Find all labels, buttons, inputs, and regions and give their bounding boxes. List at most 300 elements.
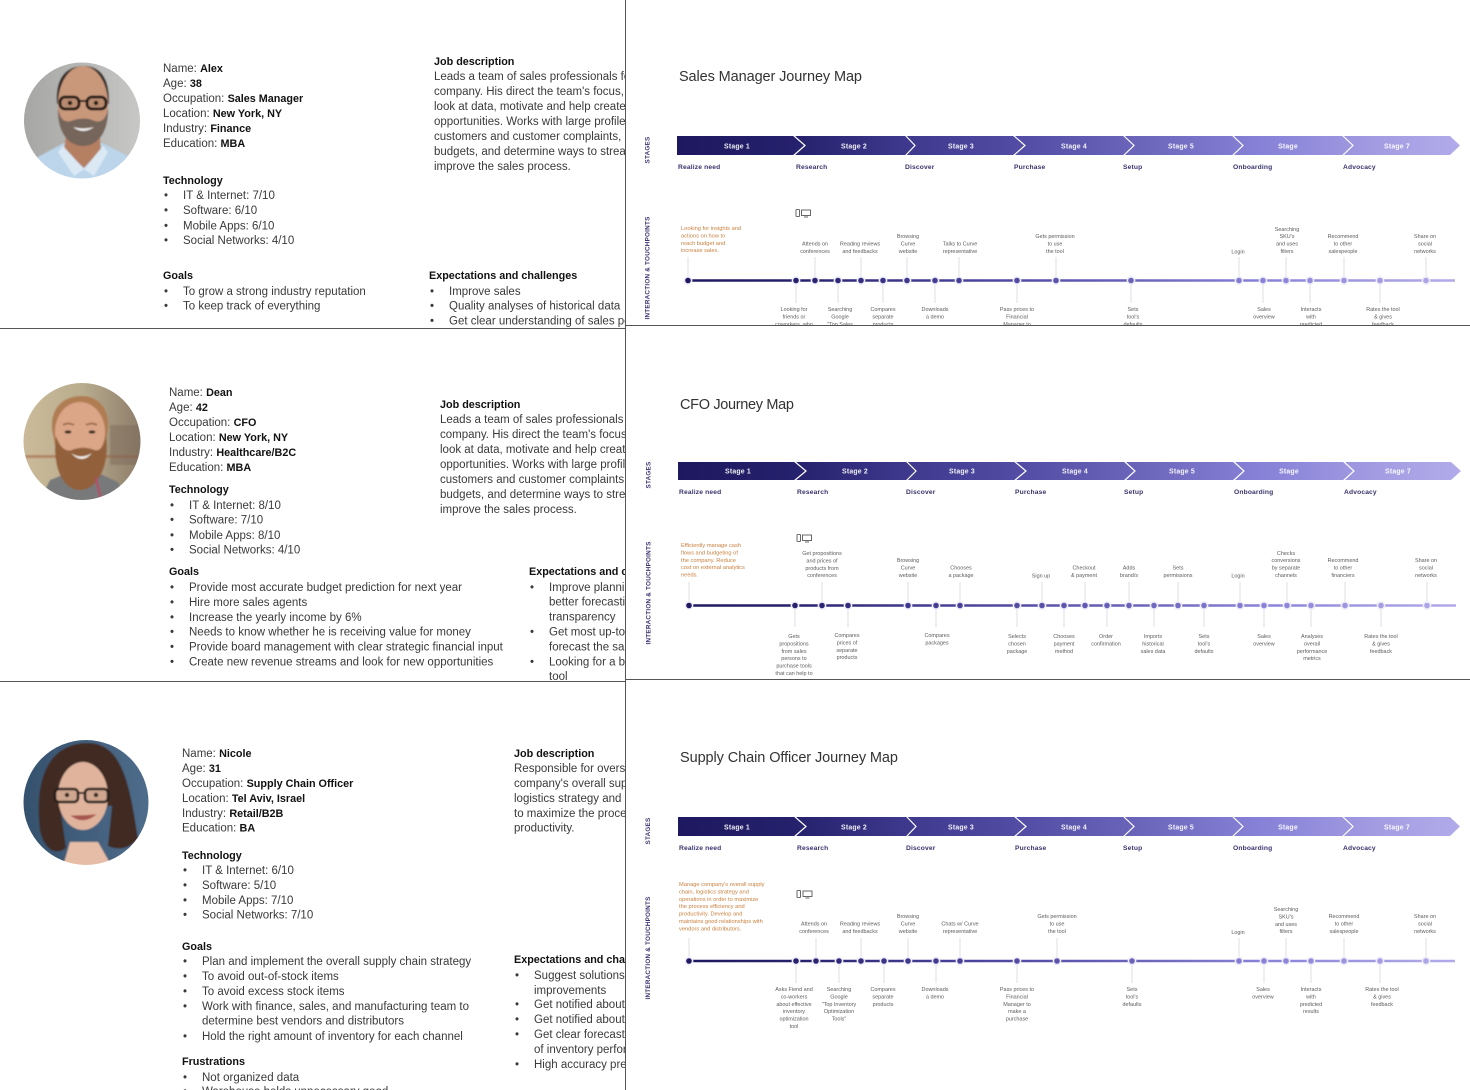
technology list: Software: 5/10	[202, 880, 276, 892]
touchpoints above line: Recommend	[1329, 914, 1359, 920]
technology list: •	[183, 895, 187, 907]
touchpoints above line: and uses	[1275, 922, 1297, 928]
touchpoints below line: Interacts	[1301, 307, 1322, 313]
job description: Job description	[440, 399, 520, 411]
touchpoints below line: "Top Sales	[827, 322, 853, 328]
customer need note: needs.	[681, 573, 698, 579]
axis label: stages: STAGES	[646, 462, 652, 488]
technology list: Social Networks: 7/10	[202, 910, 313, 922]
expectations and challenges: •	[430, 316, 434, 328]
touchpoints below line: feedback	[1370, 649, 1392, 655]
axis label: stages: STAGES	[645, 818, 652, 844]
persona details: Education: MBA	[163, 138, 245, 150]
touchpoints above line: website	[898, 929, 917, 935]
touchpoints above line: representative	[943, 249, 977, 255]
stage chevron arrow	[677, 135, 1460, 156]
touchpoints below line: Rates the tool	[1364, 634, 1398, 640]
stage chevron arrow: Stage 7	[1384, 824, 1410, 832]
customer need note: the process efficiency and	[679, 904, 745, 910]
touchpoints below line: performance	[1297, 649, 1327, 655]
goals list: •	[164, 300, 168, 312]
expectations and challenges: Get notified about	[534, 1014, 626, 1026]
touchpoints above line: by separate	[1272, 566, 1300, 572]
job description: company. His direct the team's focus,	[434, 86, 624, 98]
stage chevron arrow: Stage 3	[948, 824, 974, 832]
technology list: IT & Internet: 6/10	[202, 865, 294, 877]
photo: Alex	[24, 62, 140, 178]
touchpoints above line: Gets permission	[1037, 914, 1077, 920]
customer need note: Manage company's overall supply	[679, 882, 765, 888]
goals list: •	[170, 626, 174, 638]
persona details: Occupation: CFO	[169, 417, 256, 429]
job description	[434, 57, 625, 172]
customer need note: flows and budgeting of	[681, 550, 738, 556]
touchpoints below line: persons to	[781, 656, 807, 662]
touchpoints above line: to use	[1050, 922, 1064, 928]
expectations and challenges: forecast the sales	[549, 642, 639, 654]
stage names: Discover	[906, 489, 936, 496]
touchpoints above line: & payment	[1071, 573, 1097, 579]
connectors	[688, 257, 1426, 303]
touchpoints above line: to other	[1334, 242, 1352, 248]
goals list: Provide board management with clear strategic financial input	[189, 642, 504, 654]
touchpoints below line: co-workers	[781, 994, 808, 1000]
panel: Nicole persona	[20, 736, 679, 1090]
stage names	[678, 164, 1376, 170]
touchpoints below line: Pass prices to	[1000, 987, 1034, 993]
touchpoints below line: feedback	[1371, 1002, 1393, 1008]
persona details: Age: 31	[182, 763, 221, 775]
expectations and challenges: better forecasting	[549, 596, 638, 608]
expectations and challenges: •	[430, 300, 434, 312]
expectations and challenges: •	[515, 1059, 519, 1071]
touchpoints below line: tool's	[1126, 994, 1139, 1000]
touchpoints above line: the tool	[1046, 249, 1064, 255]
touchpoints above line: conferences	[807, 573, 837, 579]
persona details: Industry: Retail/B2B	[182, 808, 283, 820]
touchpoints below line: confirmation	[1091, 641, 1121, 647]
persona details: Location: Tel Aviv, Israel	[182, 793, 305, 805]
stage chevron arrow: Stage	[1278, 824, 1298, 832]
touchpoints below line: a demo	[926, 314, 944, 320]
stage names: Setup	[1123, 845, 1142, 852]
goals list: •	[170, 612, 174, 624]
panel: Dean persona	[24, 383, 625, 680]
touchpoints below line: Asks Fiend and	[775, 987, 813, 993]
job description: logistics strategy and operations	[514, 793, 679, 805]
expectations and challenges: Get clear forecast	[534, 1029, 626, 1041]
touchpoints above line: SKU's	[1279, 914, 1294, 920]
touchpoints below line: separate	[872, 994, 894, 1000]
timeline	[689, 960, 1455, 962]
touchpoints below line: defaults	[1122, 1002, 1142, 1008]
touchpoints above line: Share on	[1414, 914, 1436, 920]
touchpoints above line: salespeople	[1328, 249, 1358, 255]
touchpoints below line: method	[1055, 649, 1073, 655]
touchpoints above line: Login	[1231, 574, 1245, 580]
touchpoints below line: from sales	[781, 649, 807, 655]
touchpoints below line: Rates the tool	[1366, 307, 1400, 313]
touchpoints below line: & gives	[1372, 641, 1390, 647]
touchpoints below line: Compares	[870, 307, 896, 313]
touchpoints below line: with	[1305, 314, 1316, 320]
touchpoints above line: conferences	[800, 249, 830, 255]
touchpoints below line: Compares	[924, 633, 950, 639]
touchpoints below line: Selects	[1008, 634, 1026, 640]
goals list: To keep track of everything	[183, 300, 320, 312]
persona details: Location: New York, NY	[163, 108, 282, 120]
job description: opportunities. Works with large profile	[434, 116, 626, 128]
job description: Job description	[434, 56, 514, 68]
stage names: Advocacy	[1344, 489, 1377, 496]
touchpoints above line: Browsing	[897, 914, 919, 920]
stage names: Purchase	[1014, 164, 1045, 171]
touchpoints above line	[802, 551, 1437, 580]
touchpoints above line: to use	[1048, 242, 1062, 248]
expectations and challenges: High accuracy predictions	[534, 1059, 666, 1071]
touchpoints below line: with	[1305, 994, 1316, 1000]
touchpoints above line: channels	[1275, 573, 1297, 579]
stage names: Onboarding	[1233, 845, 1272, 852]
touchpoints below line: package	[1007, 649, 1027, 655]
touchpoints above line: representative	[943, 929, 977, 935]
touchpoints above line: and prices of	[806, 558, 838, 564]
goals list: Hold the right amount of inventory for each channel	[202, 1031, 463, 1043]
photo: Dean	[24, 383, 140, 500]
technology list: Mobile Apps: 7/10	[202, 895, 293, 907]
touchpoints below line: purchase	[1006, 1017, 1028, 1023]
goals list: Provide most accurate budget prediction for next year	[189, 582, 462, 594]
touchpoints above line: social	[1419, 566, 1433, 572]
timeline nodes	[685, 957, 1430, 965]
goals list: To avoid out-of-stock items	[202, 971, 339, 983]
expectations and challenges: Get most up-to-date	[549, 626, 651, 638]
touchpoints below line: Sales	[1257, 307, 1271, 313]
panel: Sales Manager journey map	[644, 69, 1460, 328]
goals list: •	[183, 1031, 187, 1043]
expectations and challenges: Get notified about	[534, 999, 626, 1011]
goals list: •	[183, 1001, 187, 1013]
touchpoints above line: conversions	[1271, 558, 1301, 564]
stage chevron arrow: Stage 4	[1061, 144, 1087, 150]
stage chevron arrow	[678, 816, 1460, 837]
persona details: Occupation: Supply Chain Officer	[182, 778, 353, 790]
technology list: Mobile Apps: 8/10	[189, 530, 280, 542]
touchpoints above line: Curve	[901, 922, 915, 928]
panel: CFO journey map	[646, 397, 1461, 677]
touchpoints below line: friends or	[783, 314, 806, 320]
timeline	[688, 279, 1455, 282]
technology list: Software: 6/10	[183, 205, 257, 217]
stage names: Discover	[905, 164, 935, 171]
axis label: interaction and touchpoints: INTERACTION & TOUCHPOINTS	[645, 896, 652, 1000]
technology list: Technology	[169, 484, 229, 496]
touchpoints below line: Pass prices to	[1000, 307, 1034, 313]
icon: phone and monitor	[797, 534, 812, 542]
connectors	[689, 938, 1426, 983]
expectations and challenges: •	[515, 970, 519, 982]
stage names: Onboarding	[1234, 489, 1273, 496]
axis label: stages: STAGES	[644, 137, 652, 163]
touchpoints below line: purchase tools	[776, 664, 812, 670]
touchpoints below line: Sales	[1256, 987, 1270, 993]
touchpoints below line: Rates the tool	[1365, 987, 1399, 993]
persona details: Location: New York, NY	[169, 432, 288, 444]
touchpoints above line: conferences	[799, 929, 829, 935]
touchpoints above line: website	[898, 249, 917, 255]
touchpoints above line: filters	[1280, 929, 1293, 935]
touchpoints below line: predicted	[1300, 1002, 1322, 1008]
expectations and challenges: Expectations and challenges	[529, 566, 677, 578]
touchpoints above line: Talks to Curve	[943, 242, 977, 248]
touchpoints below line: Google	[831, 314, 849, 320]
touchpoints below line: prices of	[837, 640, 858, 646]
touchpoints above line: Attends on	[801, 922, 827, 928]
stage names: Realize need	[679, 489, 721, 496]
touchpoints below line: payment	[1054, 641, 1075, 647]
touchpoints below line: results	[1303, 1009, 1319, 1015]
expectations and challenges: transparency	[549, 612, 616, 624]
goals list: •	[170, 582, 174, 594]
technology list: Mobile Apps: 6/10	[183, 220, 274, 232]
touchpoints below line: Optimization	[824, 1009, 854, 1015]
persona details: Age: 38	[163, 78, 202, 90]
axis label: interaction and touchpoints: INTERACTION & TOUCHPOINTS	[646, 541, 652, 645]
stage chevron arrow: Stage 7	[1385, 468, 1411, 476]
customer need note: the company. Reduce	[681, 558, 736, 564]
touchpoints below line	[775, 987, 1399, 1030]
job description: Leads a team of sales professionals for	[440, 414, 640, 426]
touchpoints above line: Recommend	[1328, 234, 1358, 240]
touchpoints above line: financiers	[1331, 573, 1355, 579]
touchpoints above line: networks	[1414, 249, 1436, 255]
touchpoints below line: propositions	[779, 641, 809, 647]
technology list: •	[170, 500, 174, 512]
job description: company's overall supply chain,	[514, 778, 676, 790]
stage chevron arrow: Stage 3	[948, 144, 974, 150]
touchpoints above line: Attends on	[802, 242, 828, 248]
touchpoints below line: make a	[1008, 1009, 1027, 1015]
job description: improve the sales process.	[434, 161, 571, 173]
touchpoints above line: Searching	[1275, 227, 1299, 233]
expectations and challenges: •	[430, 286, 434, 298]
expectations and challenges: Expectations and challenges	[514, 954, 662, 966]
touchpoints below line: a demo	[926, 994, 944, 1000]
touchpoints below line: that can help to	[775, 671, 813, 677]
stage names: Realize need	[679, 845, 721, 852]
persona details: Name: Alex	[163, 63, 223, 75]
touchpoints below line: Analyses	[1301, 634, 1323, 640]
expectations and challenges	[430, 271, 625, 327]
touchpoints below line: Sets	[1128, 307, 1139, 313]
touchpoints below line: Searching	[828, 307, 852, 313]
touchpoints below line: Looking for	[781, 307, 808, 313]
persona details: Name: Nicole	[182, 748, 251, 760]
touchpoints above line: Chats w/ Curve	[941, 922, 979, 928]
stage chevron arrow: Stage 4	[1061, 824, 1087, 832]
stage chevron arrow	[678, 461, 1461, 481]
stage chevron arrow: Stage 5	[1169, 468, 1195, 476]
stage chevron arrow: Stage 1	[724, 824, 750, 832]
touchpoints below line: coworkers, who	[775, 322, 813, 328]
frustrations list: •	[183, 1072, 187, 1084]
goals list: •	[183, 971, 187, 983]
touchpoints above line: social	[1418, 921, 1432, 927]
customer need note: productivity. Develop and	[679, 912, 742, 918]
stage chevron arrow: Stage 1	[725, 468, 751, 476]
expectations and challenges: •	[530, 626, 534, 638]
touchpoints below line: optimization	[779, 1017, 809, 1023]
persona details: Occupation: Sales Manager	[163, 93, 303, 105]
technology list: IT & Internet: 7/10	[183, 190, 275, 202]
goals list: To grow a strong industry reputation	[183, 286, 366, 298]
touchpoints above line: filters	[1280, 249, 1294, 255]
touchpoints above line: Sign up	[1032, 574, 1050, 580]
expectations and challenges	[530, 567, 625, 680]
touchpoints below line: historical	[1142, 641, 1164, 647]
technology list	[169, 484, 300, 556]
panel: Alex persona	[20, 56, 682, 328]
stage chevron arrow: Stage 2	[842, 468, 868, 476]
timeline nodes	[685, 602, 1431, 609]
goals list	[169, 566, 504, 668]
timeline	[689, 604, 1456, 607]
customer need note: maintains good relationships with	[679, 919, 763, 925]
touchpoints above line	[799, 907, 1436, 936]
touchpoints below line: Compares	[870, 987, 896, 993]
job description: look at data, motivate and help create	[440, 444, 632, 456]
touchpoints below line: Sets	[1127, 987, 1138, 993]
touchpoints above line: and feedbacks	[842, 249, 878, 255]
technology list: Software: 7/10	[189, 514, 263, 526]
touchpoints below line: inventory	[783, 1009, 805, 1015]
technology list: Technology	[163, 175, 223, 187]
touchpoints below line	[775, 633, 1398, 677]
stage chevron arrow: Stage 4	[1062, 468, 1088, 476]
customer need note: cost on external analytics	[681, 565, 745, 571]
expectations and challenges: Looking for a better	[549, 656, 648, 668]
touchpoints below line: Google	[830, 994, 848, 1000]
touchpoints above line: Reading reviews	[840, 922, 880, 928]
technology list: Social Networks: 4/10	[183, 235, 294, 247]
goals list: determine best vendors and distributors	[202, 1016, 404, 1028]
touchpoints above line: website	[898, 573, 917, 579]
customer need note: operations in order to maximize	[679, 897, 758, 903]
touchpoints above line: Reading reviews	[840, 242, 880, 248]
goals list: •	[183, 956, 187, 968]
touchpoints below line: Manager to	[1003, 322, 1031, 328]
goals list: Goals	[182, 941, 212, 953]
touchpoints above line: Share on	[1414, 234, 1436, 240]
job description	[514, 749, 625, 834]
expectations and challenges: •	[530, 656, 534, 668]
touchpoints below line: Downloads	[922, 307, 949, 313]
touchpoints below line: packages	[925, 640, 949, 646]
expectations and challenges: •	[515, 1029, 519, 1041]
persona details: Industry: Healthcare/B2C	[169, 447, 296, 459]
expectations and challenges: Improve sales	[449, 286, 521, 298]
touchpoints above line: Adds	[1123, 566, 1135, 572]
technology list: •	[170, 544, 174, 556]
touchpoints below line: Order	[1099, 634, 1113, 640]
stage names: Research	[797, 489, 828, 496]
stage names	[679, 489, 1377, 496]
touchpoints below line: about effective	[776, 1002, 812, 1008]
touchpoints above line: salespeople	[1329, 929, 1359, 935]
technology list: Technology	[182, 850, 242, 862]
touchpoints above line: networks	[1414, 929, 1436, 935]
icon: phone and monitor	[796, 210, 810, 217]
touchpoints above line: brand/s	[1120, 573, 1138, 579]
goals list: Create new revenue streams and look for new opportunities	[189, 656, 494, 668]
job description: company. His direct the team's focus,	[440, 429, 630, 441]
customer need note: increase sales.	[681, 248, 719, 254]
touchpoints below line: Sets	[1199, 634, 1210, 640]
touchpoints below line: defaults	[1194, 649, 1214, 655]
stage names: Advocacy	[1343, 845, 1376, 852]
technology list	[163, 175, 294, 247]
touchpoints below line: overview	[1252, 994, 1274, 1000]
persona details: Education: MBA	[169, 462, 251, 474]
technology list: Social Networks: 4/10	[189, 544, 300, 556]
touchpoints below line: Searching	[827, 987, 851, 993]
touchpoints above line: SKU's	[1280, 234, 1295, 240]
frustrations list	[182, 1056, 388, 1090]
job description: budgets, and determine ways to streamline	[434, 146, 653, 158]
expectations and challenges: Quality analyses of historical data	[449, 300, 621, 312]
goals list: Goals	[169, 566, 199, 578]
technology list: •	[164, 190, 168, 202]
stage names: Research	[796, 164, 827, 171]
technology list: IT & Internet: 8/10	[189, 500, 281, 512]
job description: to maximize the process	[514, 808, 638, 820]
touchpoints below line: Downloads	[922, 987, 949, 993]
goals list: •	[170, 597, 174, 609]
touchpoints above line: Searching	[1274, 907, 1298, 913]
goals list: To avoid excess stock items	[202, 986, 345, 998]
touchpoints above line: products from	[805, 566, 839, 572]
job description: look at data, motivate and help create	[434, 101, 626, 113]
stage names: Purchase	[1015, 489, 1046, 496]
touchpoints above line: Get propositions	[802, 551, 842, 557]
job description: Job description	[514, 748, 594, 760]
touchpoints below line: Imports	[1144, 634, 1162, 640]
touchpoints below line: "Top Inventory	[822, 1002, 857, 1008]
technology list: •	[183, 910, 187, 922]
expectations and challenges: •	[515, 1014, 519, 1026]
connectors	[689, 582, 1427, 627]
photo: Nicole	[24, 740, 148, 865]
technology list: •	[183, 880, 187, 892]
touchpoints below line: Compares	[834, 633, 860, 639]
stage names: Realize need	[678, 164, 720, 171]
title: Sales Manager Journey Map	[679, 69, 862, 85]
goals list: •	[164, 286, 168, 298]
touchpoints below line: Financial	[1006, 314, 1028, 320]
customer need note: reach budget and	[681, 241, 725, 247]
expectations and challenges: •	[515, 999, 519, 1011]
stage names: Setup	[1123, 164, 1142, 171]
touchpoints above line: Sets	[1173, 566, 1184, 572]
panel: Supply Chain Officer journey map	[645, 750, 1460, 1030]
stage chevron arrow: Stage 5	[1168, 824, 1194, 832]
touchpoints above line: Recommend	[1328, 558, 1358, 564]
touchpoints above line: the tool	[1048, 929, 1066, 935]
stage chevron arrow: Stage 5	[1168, 144, 1194, 150]
customer need note: actions on how to	[681, 233, 725, 239]
technology list	[182, 850, 313, 922]
title: Supply Chain Officer Journey Map	[680, 750, 898, 766]
